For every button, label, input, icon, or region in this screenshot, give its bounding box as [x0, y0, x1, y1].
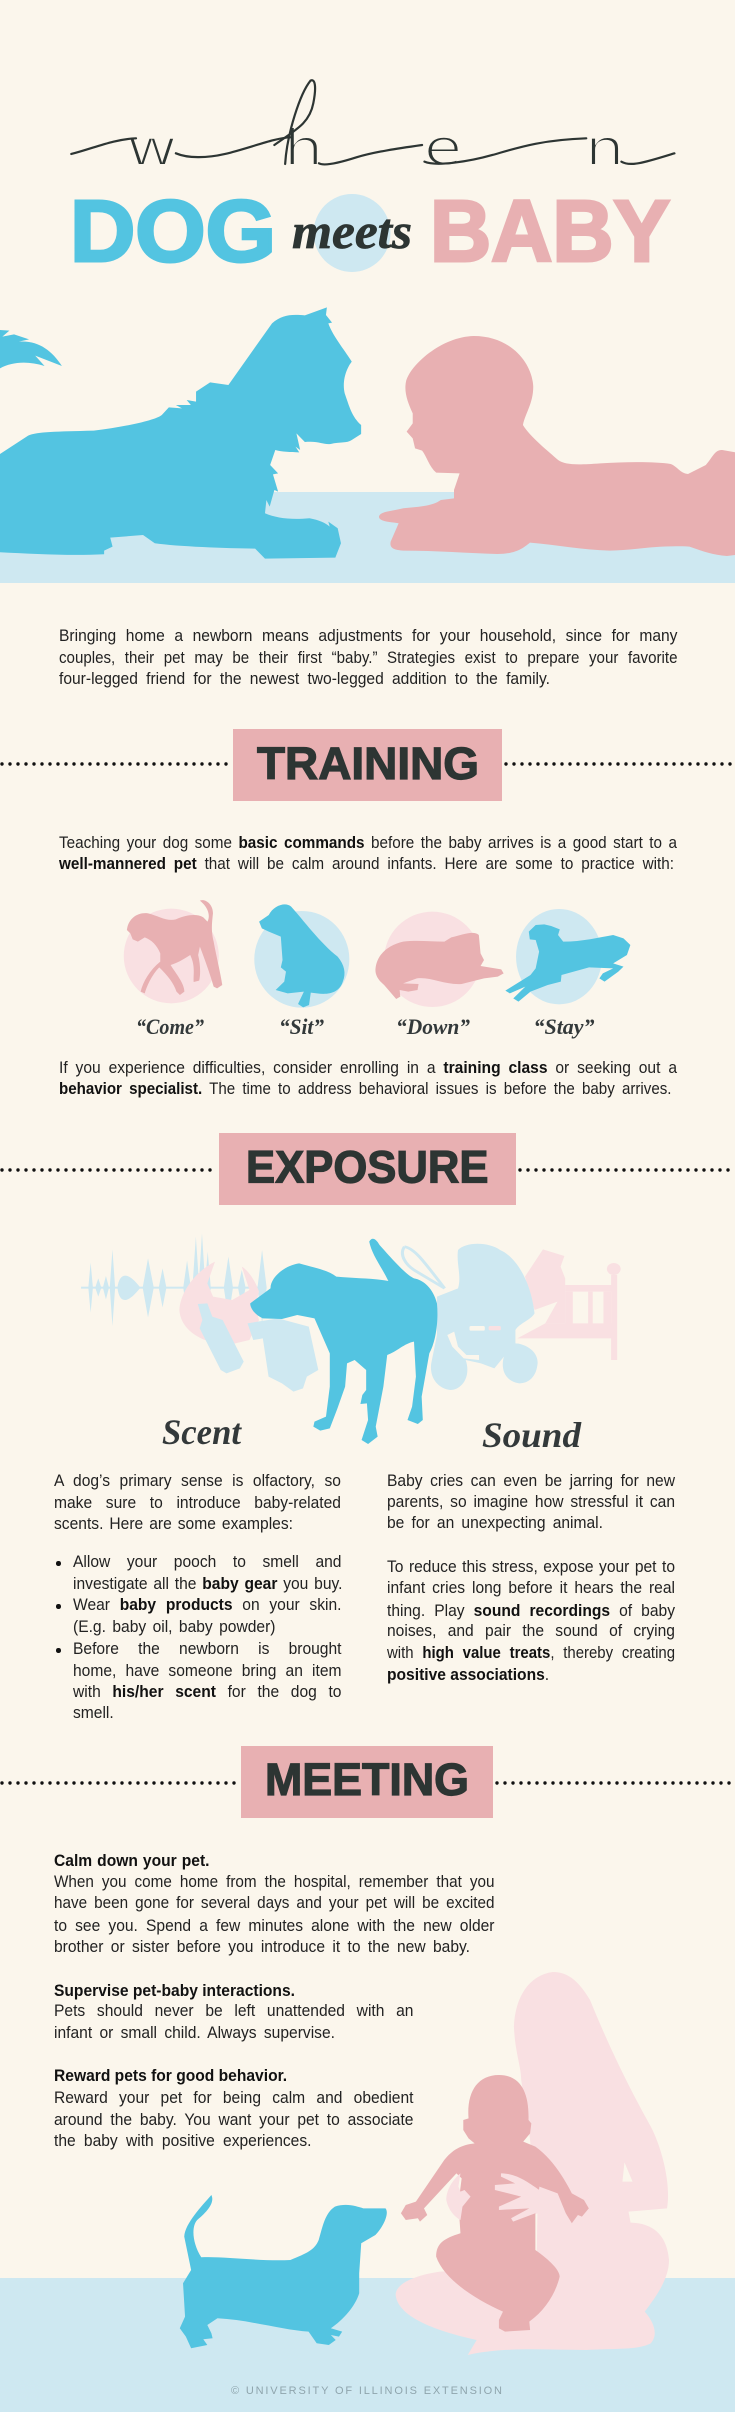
floor band: hero: [0, 492, 735, 583]
command labels: “Stay”: [534, 1014, 594, 1039]
scent text column: home, have someone bring an item: [72, 1661, 341, 1680]
icon: baby bottle: [198, 1303, 244, 1373]
meeting tip: supervise: Pets should never be left unattended with an: [54, 2001, 413, 2020]
title: [70, 80, 674, 280]
meeting tip: reward: Reward pets for good behavior.: [54, 2066, 287, 2085]
sound text column: Baby cries can even be jarring for new: [387, 1471, 675, 1490]
intro text: four-legged friend for the newest two-legged addition to the family.: [58, 669, 549, 688]
title word: meets: meets: [292, 203, 412, 259]
sound text column: [387, 1471, 675, 1684]
meeting tip: calm down: [54, 1851, 494, 1956]
meeting tip: supervise: [54, 1981, 413, 2042]
training intro text: Teaching your dog some basic commands before the baby arrives is a good start to a: [58, 833, 676, 852]
scent text column: scents. Here are some examples:: [54, 1514, 293, 1533]
title word: when: when: [126, 119, 625, 177]
scent text column: make sure to introduce baby-related: [54, 1493, 341, 1512]
meeting tip: calm down: to see you. Spend a few minutes alone with the new older: [54, 1916, 494, 1935]
title word: when: [71, 80, 674, 177]
meeting tip: calm down: have been gone for several days and your pet will be excited: [54, 1893, 494, 1912]
command labels: [136, 1014, 594, 1039]
sound text column: To reduce this stress, expose your pet to: [387, 1557, 675, 1576]
icon: onesie: [248, 1318, 318, 1392]
sound text column: thing. Play sound recordings of baby: [387, 1601, 675, 1620]
meeting tip: supervise: Supervise pet-baby interactions.: [54, 1981, 295, 2000]
training follow-up text: [58, 1058, 678, 1098]
scent text column: Wear baby products on your skin.: [72, 1595, 341, 1614]
intro text: Bringing home a newborn means adjustments for your household, since for many: [58, 626, 677, 645]
sound text column: infant cries long before it hears the real: [387, 1578, 675, 1597]
meeting tip: calm down: When you come home from the hospital, remember that you: [54, 1872, 494, 1891]
hero illustration: dog and baby: [0, 307, 735, 559]
intro text: couples, their pet may be their first “baby.” Strategies exist to prepare your favorite: [58, 648, 677, 667]
icon: basset hound: [180, 2195, 387, 2348]
icon: pink bottle: [525, 1249, 565, 1323]
subheading: scent: Scent: [162, 1412, 242, 1452]
meeting tip: calm down: brother or sister before you introduce it to the new baby.: [54, 1937, 470, 1956]
meeting tip: reward: Reward your pet for being calm and obedient: [54, 2088, 413, 2107]
icon: mother: [396, 1972, 669, 2355]
heading: exposure: EXPOSURE: [246, 1142, 488, 1193]
sound text column: with high value treats, thereby creating: [387, 1643, 675, 1662]
icon: down: [375, 912, 504, 1007]
heading: training: TRAINING: [257, 738, 479, 789]
icon: sniffing dog: [250, 1239, 437, 1444]
meeting tip: reward: around the baby. You want your pet to associate: [54, 2110, 413, 2129]
icon: safety pin: [402, 1247, 445, 1288]
command labels: “Down”: [396, 1014, 470, 1039]
icon: baby: [401, 2075, 589, 2332]
floor band: bottom: [0, 2278, 735, 2412]
training intro text: well-mannered pet that will be calm around infants. Here are some to practice with:: [58, 854, 673, 873]
icon: stroller: [431, 1244, 538, 1390]
scent text column: investigate all the baby gear you buy.: [72, 1574, 342, 1593]
section divider: meeting: [2, 1746, 735, 1818]
training intro text: [58, 833, 677, 873]
scent text column: with his/her scent for the dog to: [72, 1682, 341, 1701]
training command icons: [124, 900, 630, 1039]
training follow-up text: behavior specialist. The time to address behavioral issues is before the baby arrives.: [58, 1079, 671, 1098]
scent text column: A dog’s primary sense is olfactory, so: [54, 1471, 341, 1490]
bullet markers: [56, 1561, 61, 1566]
scent text column: [54, 1471, 342, 1722]
icon: dog tail: [0, 330, 62, 368]
icon: stay: [505, 909, 630, 1004]
exposure illustration: [81, 1233, 621, 1444]
section divider: exposure: [2, 1133, 735, 1205]
sound text column: parents, so imagine how stressful it can: [387, 1492, 675, 1511]
scent text column: Allow your pooch to smell and: [72, 1552, 341, 1571]
meeting tip: supervise: infant or small child. Always supervise.: [54, 2023, 335, 2042]
icon: lying dog: [0, 307, 361, 559]
subheading: sound: Sound: [482, 1415, 582, 1455]
sound text column: be for an unexpecting animal.: [387, 1513, 603, 1532]
sound text column: noises, and pair the sound of crying: [387, 1621, 675, 1640]
scent text column: smell.: [72, 1703, 113, 1722]
training follow-up text: If you experience difficulties, consider enrolling in a training class or seeking out a: [58, 1058, 677, 1077]
icon: pink bib: [179, 1262, 259, 1345]
title word: dog: DOG: [70, 183, 276, 280]
meeting illustration: [180, 1972, 669, 2355]
icon: sound wave: [81, 1233, 267, 1326]
scent text column: Before the newborn is brought: [72, 1639, 341, 1658]
heading: meeting: MEETING: [265, 1754, 469, 1805]
icon: crib: [517, 1263, 621, 1360]
meeting tip: reward: the baby with positive experiences.: [54, 2131, 311, 2150]
meeting tip: calm down: Calm down your pet.: [54, 1851, 209, 1870]
icon: come: [124, 900, 222, 1003]
icon: crawling baby: [379, 336, 735, 556]
icon: mother's hands: [446, 2173, 558, 2222]
meets circle: [314, 194, 390, 272]
intro text: [58, 626, 678, 688]
icon: sit: [254, 904, 349, 1008]
meeting tip: reward: [54, 2066, 414, 2150]
sound text column: positive associations.: [387, 1665, 549, 1684]
command labels: “Sit”: [279, 1014, 324, 1039]
section divider: training: [2, 729, 735, 801]
scent text column: (E.g. baby oil, baby powder): [72, 1617, 275, 1636]
footer credit: © UNIVERSITY OF ILLINOIS EXTENSION: [231, 2385, 502, 2397]
title word: baby: BABY: [430, 183, 670, 280]
command labels: “Come”: [136, 1014, 204, 1039]
